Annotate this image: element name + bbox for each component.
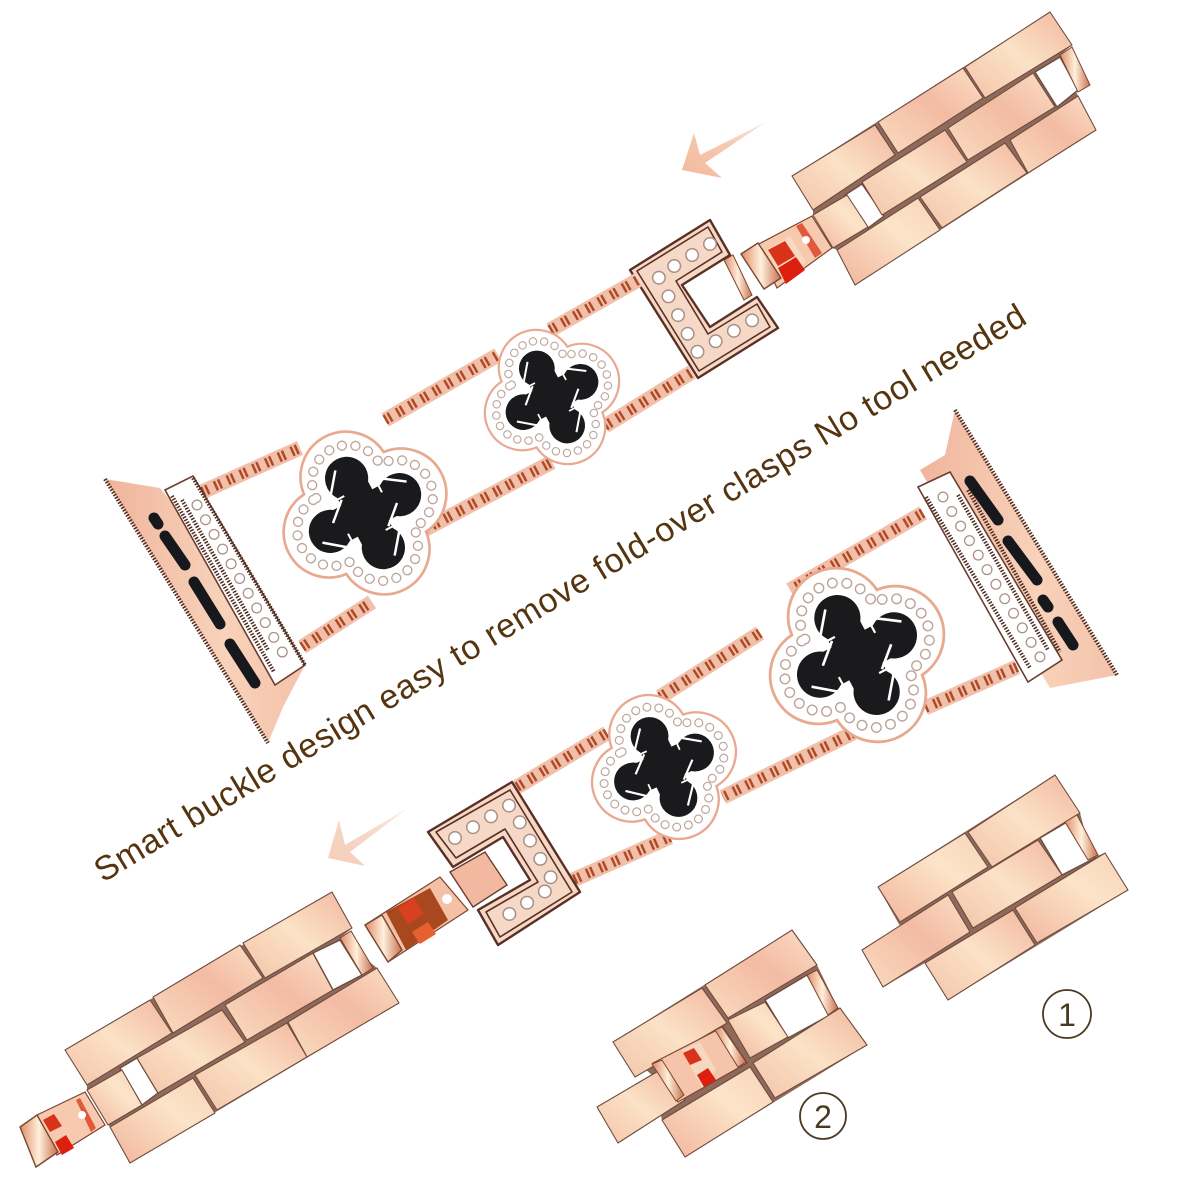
step number 1: 1 xyxy=(1058,997,1076,1033)
headline text along the diagonal: Smart buckle design easy to remove fold-over clasps No tool needed xyxy=(87,297,1033,890)
step number 2 xyxy=(800,1093,846,1139)
clover: upper band small xyxy=(456,301,648,493)
link block: step 2 xyxy=(597,930,867,1157)
buckle: lower band xyxy=(428,782,580,945)
clasp: top right xyxy=(741,216,832,289)
link block: top right xyxy=(792,12,1096,285)
link block: bottom left xyxy=(65,892,399,1163)
watch lug: upper band xyxy=(105,476,305,743)
clover: lower band small xyxy=(564,667,764,867)
chain: upper band strands xyxy=(202,280,692,647)
clasp: lower band xyxy=(365,877,468,962)
step number 2: 2 xyxy=(814,1099,832,1135)
chain: lower band strands xyxy=(517,513,1017,880)
clover: lower band large xyxy=(733,531,981,779)
clover: upper band large xyxy=(249,397,481,629)
arrow: lower pointing left xyxy=(328,808,408,866)
step number 1 xyxy=(1043,990,1091,1038)
buckle: upper band xyxy=(630,220,778,378)
link block: step 1 xyxy=(862,775,1128,1000)
watch lug: lower band xyxy=(918,410,1117,688)
clasp: bottom left xyxy=(20,1092,105,1167)
arrow: top pointing left xyxy=(682,122,766,178)
